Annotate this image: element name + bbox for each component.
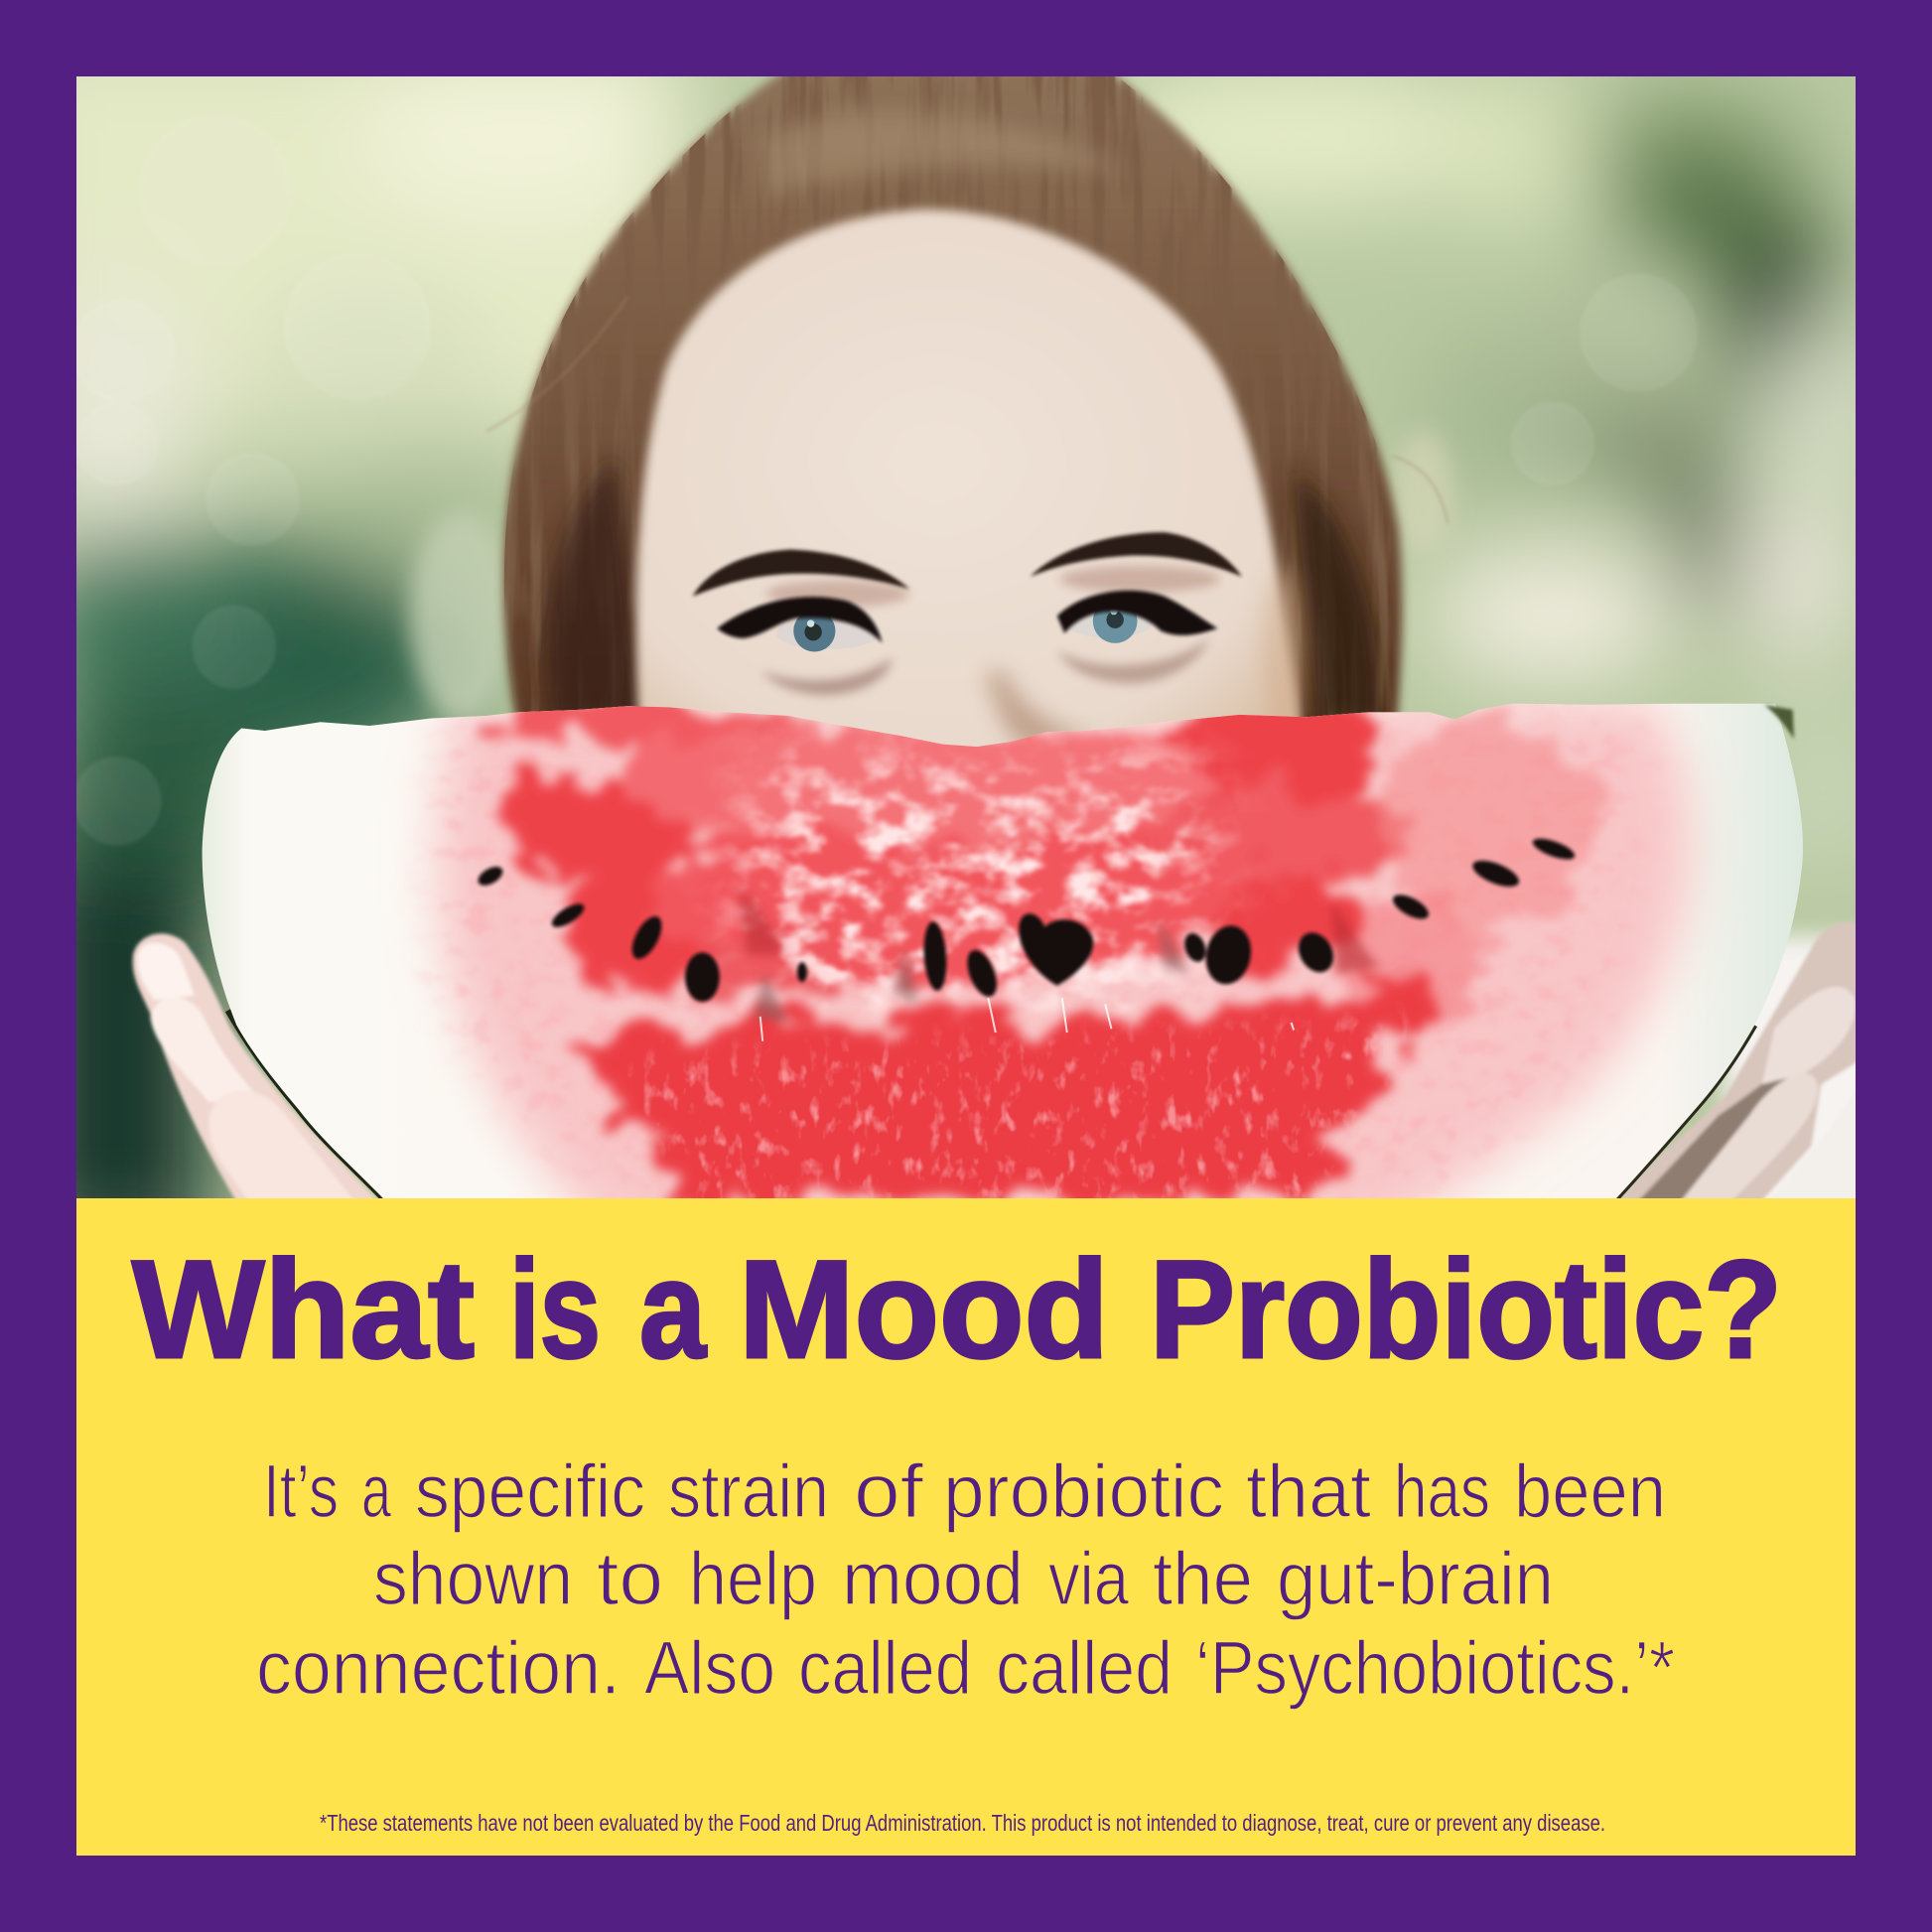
nose shadow [986, 671, 1097, 752]
heading: Mood [739, 1231, 1109, 1387]
body line 3: Also [644, 1626, 775, 1711]
body line 3: connection. [256, 1626, 621, 1711]
under-eye shadows [761, 658, 893, 695]
yellow text panel [76, 1198, 1856, 1856]
disclaimer footnote: *These statements have not been evaluated by the Food and Drug Administration. This product is not intended to diagnose, treat, cure or prevent any disease. [320, 1810, 1605, 1836]
right eyebrow [1031, 532, 1242, 577]
body line 2: help [689, 1537, 817, 1621]
seed streaks [740, 888, 1380, 1023]
body line 1: It’s [263, 1449, 339, 1534]
body line 1: been [1514, 1449, 1666, 1534]
body line 1: a [361, 1449, 392, 1534]
body line 1: strain [668, 1449, 829, 1534]
body line 2 [373, 1537, 1554, 1621]
right eye [1057, 591, 1217, 643]
melon rind tip [1764, 705, 1794, 740]
body line 1: that [1246, 1449, 1371, 1534]
red flesh bottom [579, 976, 1417, 1201]
white seed-fibre streaks [760, 998, 1294, 1041]
pale band below seeds [755, 1011, 1189, 1042]
pale hair wisps halo [410, 511, 514, 721]
rind dark edge [228, 1011, 392, 1207]
blurred garden background [76, 76, 1856, 1198]
body line 3: called [798, 1626, 972, 1711]
body line 2: to [597, 1537, 663, 1621]
pale flesh mottling [740, 763, 1207, 1029]
rind [185, 690, 1824, 1220]
body line 2: shown [373, 1537, 573, 1621]
body line 1: has [1394, 1449, 1490, 1534]
body line 2: mood [842, 1537, 1024, 1621]
body line 3 [256, 1626, 1675, 1711]
watermelon slice [185, 690, 1824, 1232]
heading: What [132, 1231, 475, 1387]
heading: is [509, 1231, 601, 1387]
body line 1: of [854, 1449, 924, 1534]
body line 3: ‘Psychobiotics.’* [1195, 1626, 1675, 1711]
body line 1: specific [415, 1449, 645, 1534]
left eye [717, 597, 883, 652]
photo: woman holding watermelon smile [76, 76, 1856, 1198]
body line 2: the [1153, 1537, 1253, 1621]
bottom flesh speckle [617, 1023, 1417, 1207]
body line 2: via [1048, 1537, 1130, 1621]
seeds [475, 834, 1578, 1002]
heading: Probiotic? [1150, 1231, 1782, 1387]
face [636, 209, 1307, 770]
left eyebrow [692, 550, 909, 597]
body line 2: gut-brain [1277, 1537, 1554, 1621]
left hand [133, 933, 384, 1207]
body line 1 [263, 1449, 1666, 1534]
hair [486, 37, 1448, 740]
heading [132, 1231, 1782, 1387]
speckled flesh texture [431, 727, 1651, 1182]
bokeh highlights [76, 276, 1696, 845]
pale pink flesh [437, 702, 1690, 1232]
body text [256, 1449, 1675, 1711]
body line 1: probiotic [943, 1449, 1224, 1534]
body line 3: called [996, 1626, 1173, 1711]
heading: a [639, 1231, 707, 1387]
red flesh upper blotches [492, 690, 1601, 1023]
right hand [1601, 922, 1861, 1213]
